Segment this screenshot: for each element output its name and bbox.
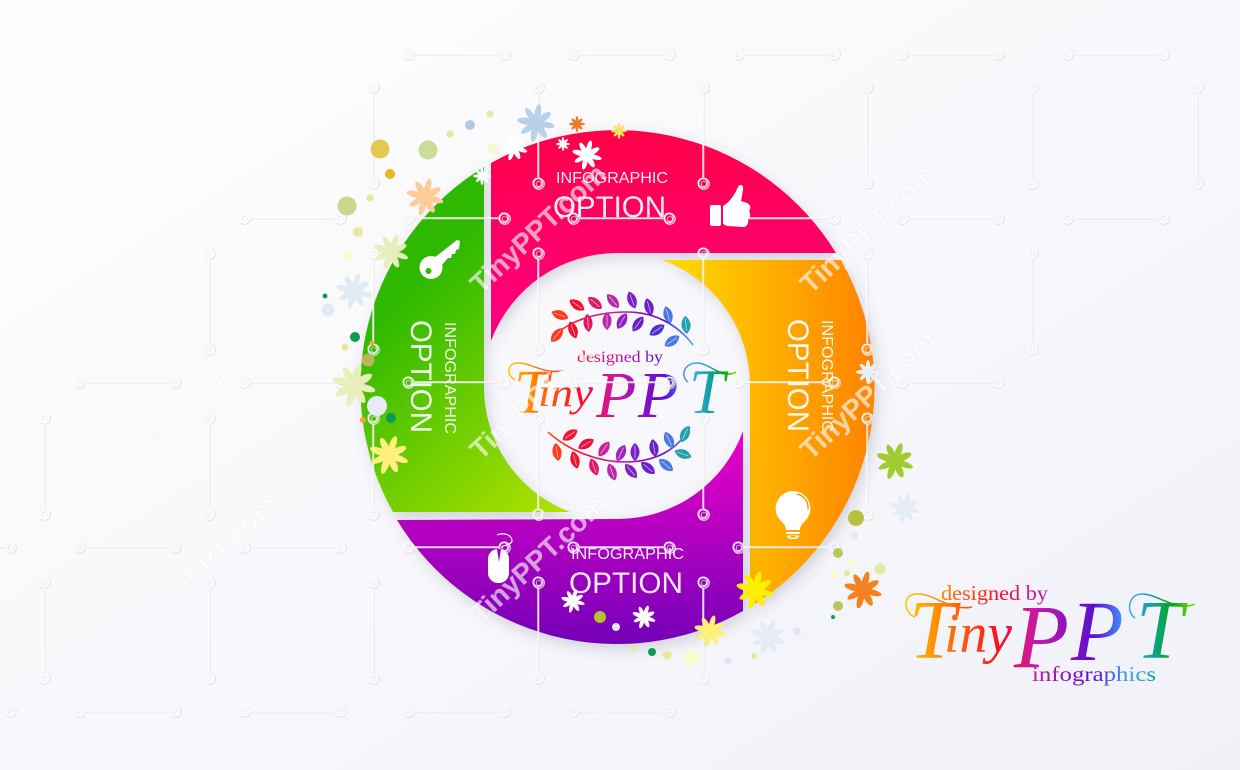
script wordmark: Tiny PPT: P: [1070, 583, 1124, 679]
bottom-right logo: [906, 581, 1195, 687]
script wordmark: Tiny PPT: iny: [538, 370, 593, 415]
label: infographic purple: INFOGRAPHIC: [571, 546, 684, 563]
label: option purple: OPTION: [569, 567, 683, 600]
label: option pink: OPTION: [553, 191, 666, 224]
script wordmark: Tiny PPT: iny: [944, 603, 1012, 665]
segment: green: [360, 167, 570, 512]
label: option orange: OPTION: [781, 319, 814, 432]
panel text: purple: [569, 546, 684, 600]
flowers scattered around ring: [327, 101, 923, 660]
icon: computer mouse: [488, 534, 512, 583]
panel text: orange: [781, 319, 835, 432]
watermark 5: TinyPPT.com: [794, 324, 942, 465]
segment: pink: [491, 130, 836, 341]
script wordmark: Tiny PPT: T: [689, 356, 729, 427]
script wordmark: Tiny PPT: P: [595, 359, 636, 432]
label: infographic green: INFOGRAPHIC: [441, 322, 458, 434]
watermark 4: TinyPPT.com: [464, 324, 612, 465]
text: infographics: infographics: [1032, 662, 1156, 686]
text: designed by: designed by: [941, 581, 1049, 605]
label: infographic orange: INFOGRAPHIC: [818, 320, 835, 432]
icon: light bulb: [776, 491, 810, 539]
script wordmark: Tiny PPT: [906, 583, 1195, 687]
donut cycle diagram: [360, 130, 874, 644]
laurel: bottom: [548, 424, 693, 482]
script wordmark: Tiny PPT: T: [514, 359, 553, 427]
script wordmark: Tiny PPT: T: [909, 584, 961, 677]
script wordmark: Tiny PPT: T: [1136, 584, 1188, 677]
watermark 7: TinyPPT.com: [464, 488, 612, 629]
panel text: green: [404, 320, 458, 434]
icon: thumbs up: [710, 185, 750, 227]
panel text: pink: [553, 170, 668, 224]
label: infographic pink: INFOGRAPHIC: [556, 170, 668, 187]
watermark 6: TinyPPT.com: [135, 488, 283, 629]
watermark 3: TinyPPT.com: [135, 324, 283, 465]
script wordmark: Tiny PPT: [509, 356, 736, 432]
segment: purple: [397, 431, 743, 644]
script wordmark: Tiny PPT: P: [1013, 588, 1069, 687]
label: option green: OPTION: [404, 320, 437, 433]
script wordmark: Tiny PPT: P: [637, 359, 678, 432]
laurel: top: [548, 290, 693, 350]
dots scattered around ring: [322, 110, 886, 665]
icon: key: [420, 240, 460, 279]
watermark 2: TinyPPT.com: [794, 158, 942, 299]
text: designed by: designed by: [577, 349, 663, 366]
watermarks: [135, 158, 942, 629]
center logo: [509, 290, 736, 482]
segment: orange: [662, 260, 874, 607]
watermark 1: TinyPPT.com: [464, 158, 612, 299]
